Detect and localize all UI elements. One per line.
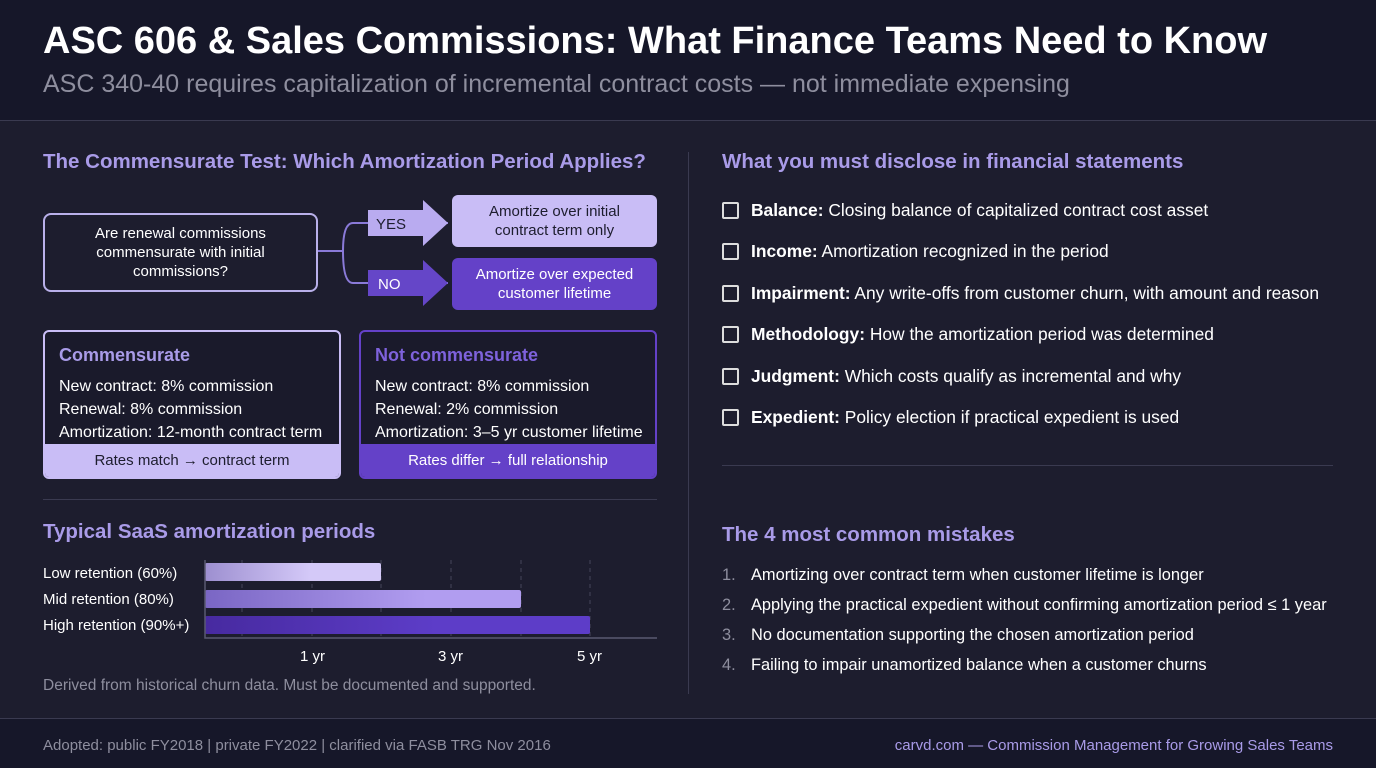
list: mistakes: Amortizing over contract term when customer lifetime is longer: [751, 566, 1204, 584]
outcome: customer lifetime: [452, 258, 657, 310]
header: [0, 0, 1376, 121]
footer left: Adopted: public FY2018 | private FY2022 | clarified via FASB TRG Nov 2016: [43, 737, 551, 754]
checklist: disclosures: Balance: Closing balance of capitalized contract cost asset: [751, 200, 1208, 220]
panel: commensurate: Renewal: 8% commission: [59, 401, 242, 418]
bar chart: Mid retention (80%): [43, 591, 174, 608]
list: mistakes: 2.: [722, 596, 736, 614]
panel: not commensurate: New contract: 8% commission: [375, 378, 589, 395]
footer right: carvd.com — Commission Management for Growing Sales Teams: [895, 737, 1333, 754]
question box: [43, 213, 318, 292]
checklist: disclosures: Expedient: Policy election if practical expedient is used: [751, 407, 1179, 427]
arrow: YES: [368, 200, 448, 246]
list: mistakes: 3.: [722, 626, 736, 644]
outcome: contract term: [452, 195, 657, 247]
bar chart: Low retention (60%): [43, 565, 177, 582]
checklist: disclosures: [722, 200, 1319, 427]
outcome: contract term: Amortize over initial contract term only: [489, 203, 620, 239]
outcome: customer lifetime: Amortize over expected customer lifetime: [476, 266, 633, 302]
subtitle: ASC 340-40 requires capitalization of incremental contract costs — not immediate expensing: [43, 70, 1070, 98]
footer band: [361, 444, 655, 477]
footer band: Rates match → contract term: [94, 452, 290, 469]
panel: not commensurate: Renewal: 2% commission: [375, 401, 558, 418]
connectors: [318, 222, 448, 284]
panel: commensurate: [43, 330, 341, 479]
panel: commensurate: Commensurate: [59, 345, 190, 365]
panel: not commensurate: [359, 330, 657, 479]
footer band: [45, 444, 339, 477]
list: mistakes: No documentation supporting the chosen amortization period: [751, 626, 1194, 644]
panel: not commensurate: Amortization: 3–5 yr customer lifetime: [375, 424, 643, 441]
bar chart: [43, 560, 657, 665]
heading: amortization periods: Typical SaaS amortization periods: [43, 520, 375, 543]
arrow: YES: YES: [376, 216, 406, 233]
bar chart: 5 yr: [577, 648, 602, 665]
list: mistakes: 1.: [722, 566, 736, 584]
list: mistakes: [722, 566, 1327, 674]
title: ASC 606 & Sales Commissions: What Finance Teams Need to Know: [43, 20, 1267, 62]
bar chart: High retention (90%+): [43, 617, 189, 634]
panel: not commensurate: Not commensurate: [375, 345, 538, 365]
checklist: disclosures: Impairment: Any write-offs from customer churn, with amount and reason: [751, 283, 1319, 303]
note: Derived from historical churn data. Must be documented and supported.: [43, 677, 536, 694]
list: mistakes: Failing to impair unamortized balance when a customer churns: [751, 656, 1207, 674]
checklist: disclosures: Income: Amortization recognized in the period: [751, 241, 1109, 261]
panel: commensurate: Amortization: 12-month contract term: [59, 424, 322, 441]
checklist: disclosures: Judgment: Which costs qualify as incremental and why: [751, 366, 1181, 386]
bar chart: 1 yr: [300, 648, 325, 665]
arrow: NO: NO: [378, 276, 400, 293]
bar chart: 3 yr: [438, 648, 463, 665]
footer band: Rates differ → full relationship: [408, 452, 608, 469]
footer: [0, 718, 1376, 768]
heading: mistakes: The 4 most common mistakes: [722, 523, 1015, 546]
arrow: NO: [368, 260, 448, 306]
list: mistakes: 4.: [722, 656, 736, 674]
checklist: disclosures: Methodology: How the amortization period was determined: [751, 324, 1214, 344]
question box: Are renewal commissions commensurate with initial commissions?: [95, 225, 266, 280]
list: mistakes: Applying the practical expedient without confirming amortization period ≤ 1 year: [751, 596, 1327, 614]
heading: commensurate test: The Commensurate Test: Which Amortization Period Applies?: [43, 150, 646, 173]
panel: commensurate: New contract: 8% commission: [59, 378, 273, 395]
flowchart: [43, 195, 657, 310]
heading: disclosures: What you must disclose in financial statements: [722, 150, 1183, 173]
